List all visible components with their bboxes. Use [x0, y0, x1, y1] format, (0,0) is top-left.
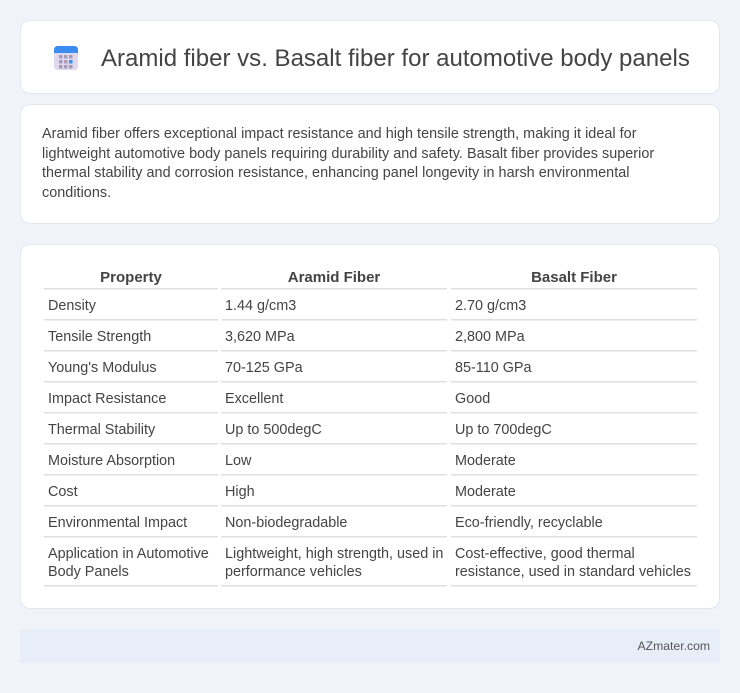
row: impact resistance: Excellent — [225, 391, 283, 407]
summary paragraph — [42, 126, 654, 200]
row: impact resistance: Impact Resistance — [48, 391, 166, 407]
summary paragraph: Aramid fiber offers exceptional impact resistance and high tensile strength, making it ideal for — [42, 126, 637, 142]
row: environmental impact — [48, 515, 603, 531]
summary paragraph: lightweight automotive body panels requiring durability and safety. Basalt fiber provides superior — [42, 146, 654, 162]
row: cost: Cost — [48, 484, 78, 500]
icon: calendar — [54, 46, 78, 70]
table header: Aramid Fiber — [288, 269, 380, 286]
row: application: Application in Automotive — [48, 546, 209, 562]
row: density: 1.44 g/cm3 — [225, 298, 296, 314]
row: environmental impact: Environmental Impact — [48, 515, 187, 531]
row: young's modulus — [48, 360, 532, 376]
table header: Basalt Fiber — [531, 269, 617, 286]
row: young's modulus: Young's Modulus — [48, 360, 157, 376]
row: impact resistance: Good — [455, 391, 490, 407]
row: impact resistance — [48, 391, 490, 407]
row: application: performance vehicles — [225, 564, 362, 580]
summary paragraph: thermal stability and corrosion resistance, enhancing panel longevity in harsh environmental — [42, 165, 630, 181]
row: density: 2.70 g/cm3 — [455, 298, 526, 314]
row: thermal stability — [48, 422, 552, 438]
row: moisture absorption: Moderate — [455, 453, 516, 469]
footer text: AZmater.com — [638, 639, 710, 653]
row: moisture absorption — [48, 453, 516, 469]
summary paragraph: conditions. — [42, 184, 111, 200]
row: tensile strength: 3,620 MPa — [225, 329, 295, 345]
row: cost — [48, 484, 516, 500]
row: cost: High — [225, 484, 255, 500]
row: application — [48, 546, 691, 580]
row: moisture absorption: Low — [225, 453, 251, 469]
panel: summary text — [20, 104, 720, 224]
row: tensile strength: 2,800 MPa — [455, 329, 525, 345]
row: application: Body Panels — [48, 564, 129, 580]
row: application: Lightweight, high strength, used in — [225, 546, 443, 562]
row: thermal stability: Up to 700degC — [455, 422, 552, 438]
row: application: resistance, used in standard vehicles — [455, 564, 691, 580]
table header — [100, 269, 617, 286]
row: young's modulus: 70-125 GPa — [225, 360, 303, 376]
row: thermal stability: Up to 500degC — [225, 422, 322, 438]
row: density: Density — [48, 298, 96, 314]
row: moisture absorption: Moisture Absorption — [48, 453, 175, 469]
title: Aramid fiber vs. Basalt fiber for automotive body panels — [101, 45, 690, 72]
title card — [20, 20, 720, 94]
row: thermal stability: Thermal Stability — [48, 422, 155, 438]
comparison table — [44, 269, 697, 587]
row: young's modulus: 85-110 GPa — [455, 360, 532, 376]
row: tensile strength: Tensile Strength — [48, 329, 151, 345]
panel: comparison table — [20, 244, 720, 609]
footer bar — [20, 629, 720, 663]
row: application: Cost-effective, good thermal — [455, 546, 635, 562]
row: cost: Moderate — [455, 484, 516, 500]
row: environmental impact: Non-biodegradable — [225, 515, 347, 531]
row: tensile strength — [48, 329, 525, 345]
row: density — [48, 298, 526, 314]
table header: Property — [100, 269, 162, 286]
row: environmental impact: Eco-friendly, recyclable — [455, 515, 603, 531]
